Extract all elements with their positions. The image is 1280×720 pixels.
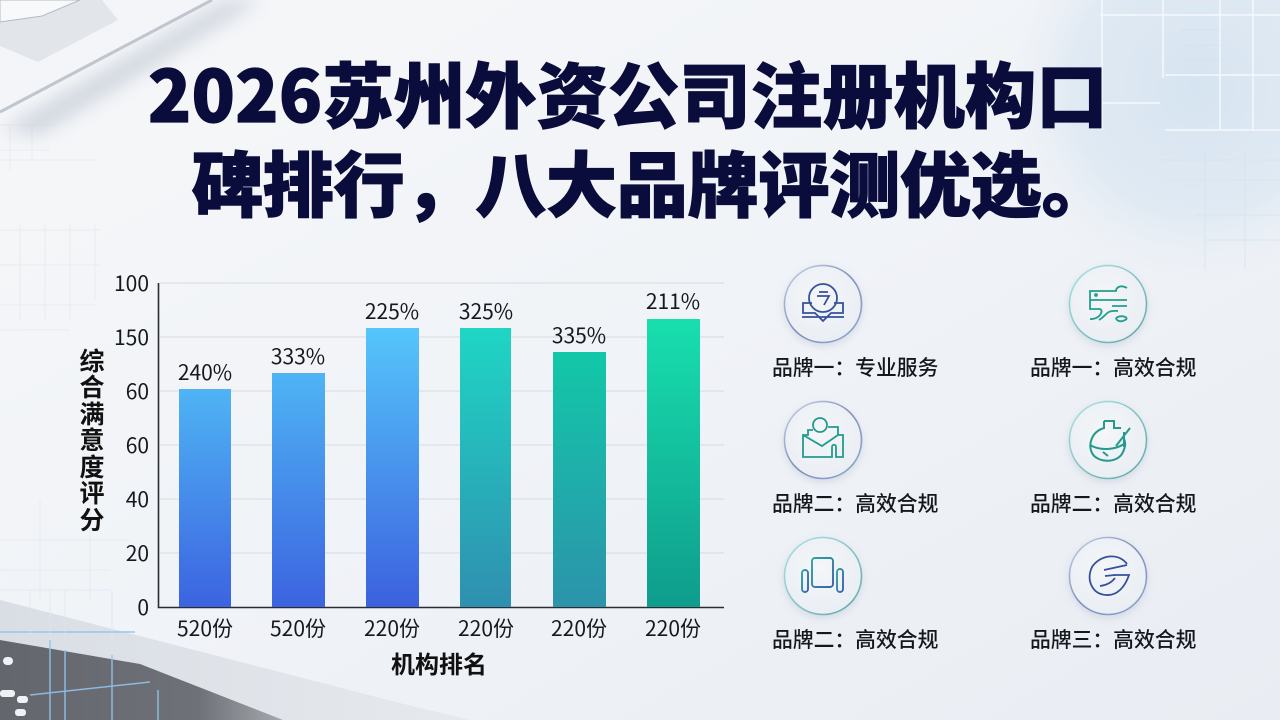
brand item: bottom left — [772, 538, 939, 653]
decoration: circuit board at bottom left — [0, 590, 470, 720]
x axis category labels — [177, 613, 701, 643]
bar value labels — [178, 286, 700, 387]
bar value labels: 225% — [365, 296, 419, 326]
y axis tick labels: 60 — [126, 430, 149, 460]
y axis title: 合 — [79, 368, 105, 404]
bar value labels: 240% — [178, 357, 232, 387]
bars — [179, 319, 700, 607]
bar value labels: 325% — [459, 296, 513, 326]
title — [148, 41, 1112, 232]
brand item: top right: 品牌一：高效合规 — [1030, 351, 1197, 381]
y axis tick labels: 40 — [126, 484, 149, 514]
bar chart — [79, 268, 724, 680]
x axis category labels: 520份 — [270, 613, 326, 643]
brand grid — [772, 266, 1197, 653]
x axis category labels: 220份 — [645, 613, 701, 643]
brand item: middle left — [772, 402, 939, 517]
bar value labels: 211% — [646, 286, 700, 316]
y axis tick labels: 60 — [126, 376, 149, 406]
x axis title: 机构排名 — [391, 645, 487, 680]
chart gridlines and axes — [158, 283, 724, 608]
y axis title — [79, 342, 105, 537]
brand item: middle right: 品牌二：高效合规 — [1030, 487, 1197, 517]
y axis title: 意 — [79, 421, 105, 457]
x axis category labels: 520份 — [177, 613, 233, 643]
x axis category labels: 220份 — [458, 613, 514, 643]
title: 2026苏州外资公司注册机构口 — [148, 41, 1108, 143]
x axis category labels: 220份 — [364, 613, 420, 643]
title: 碑排行，八大品牌评测优选。 — [192, 130, 1112, 232]
bar value labels: 335% — [552, 320, 606, 350]
y axis tick labels: 20 — [126, 538, 149, 568]
y axis tick labels: 0 — [137, 592, 149, 622]
y axis title: 评 — [79, 474, 105, 510]
y axis title: 满 — [79, 395, 105, 431]
brand item: middle left: 品牌二：高效合规 — [772, 487, 939, 517]
bar value labels: 333% — [271, 341, 325, 371]
brand item: bottom left: 品牌二：高效合规 — [772, 623, 939, 653]
decoration: laptop at top left — [0, 0, 262, 135]
brand item: bottom right: 品牌三：高效合规 — [1030, 623, 1197, 653]
brand item: top left: 品牌一：专业服务 — [772, 351, 939, 381]
brand item: top left — [772, 266, 939, 381]
y axis title: 综 — [79, 342, 105, 378]
y axis title: 分 — [79, 501, 105, 537]
brand item: middle right — [1030, 402, 1197, 517]
brand item: top right — [1030, 266, 1197, 381]
x axis category labels: 220份 — [551, 613, 607, 643]
y axis tick labels — [114, 268, 149, 622]
y axis tick labels: 100 — [114, 268, 149, 298]
brand item: bottom right — [1030, 538, 1197, 653]
y axis tick labels: 150 — [114, 322, 149, 352]
y axis title: 度 — [79, 448, 105, 484]
